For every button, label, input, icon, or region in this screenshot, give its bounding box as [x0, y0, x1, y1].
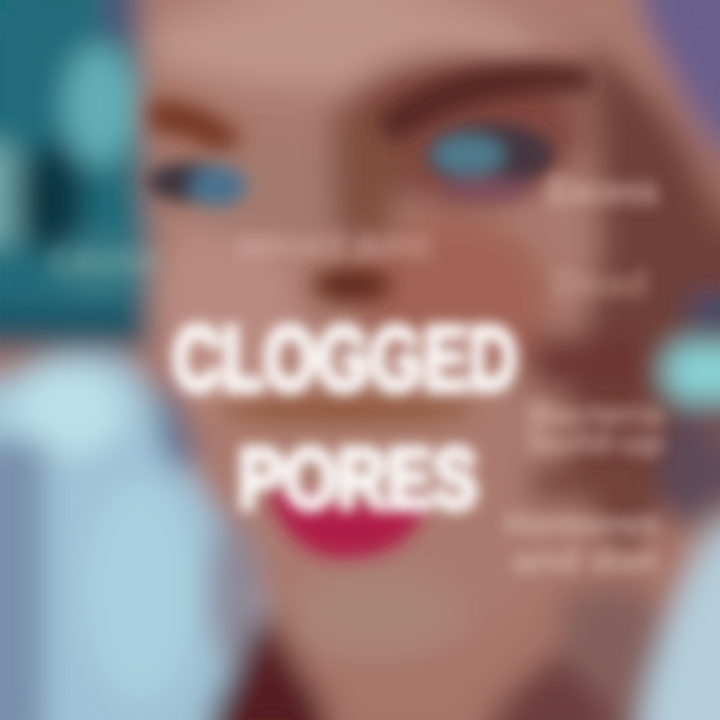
panel: right hair and shadow	[530, 40, 720, 720]
text block: right list 3	[528, 396, 664, 460]
text block: captions	[49, 169, 664, 580]
icon: purple towel top	[105, 0, 720, 165]
icon: lips	[268, 488, 425, 558]
text block: right list 4: and diet	[512, 542, 658, 580]
icon: left eye	[146, 162, 246, 206]
panel: facial features	[148, 62, 595, 421]
text block: right list 4	[504, 505, 660, 580]
text block: right list 4: Hormones	[504, 505, 660, 543]
panel: face	[140, 0, 669, 660]
icon: left eyebrow	[148, 100, 245, 152]
panel: towel lower left	[0, 354, 268, 720]
panel: dark red collar	[205, 610, 625, 720]
text block: right list 3: Bacteria	[528, 396, 664, 432]
text block: right list 2: Dead	[552, 263, 648, 305]
heading: pores: PORES	[238, 431, 478, 527]
panel: lower right towel and teal patch	[640, 295, 720, 720]
heading: clogged: CLOGGED	[172, 308, 518, 410]
icon: right eye	[426, 123, 554, 202]
icon: upper lip shadow	[215, 399, 475, 421]
panel: teal backdrop	[0, 0, 150, 350]
icon: right eyebrow	[375, 62, 595, 145]
title	[172, 308, 518, 527]
icon: nose shadow	[312, 267, 392, 303]
text block: right list 3: build-up	[528, 424, 664, 460]
text block: right list 1: Excess	[548, 169, 658, 213]
text block: upper caption: WHAT ARE	[235, 229, 435, 265]
text block: left caption: CAUSE	[49, 243, 161, 279]
